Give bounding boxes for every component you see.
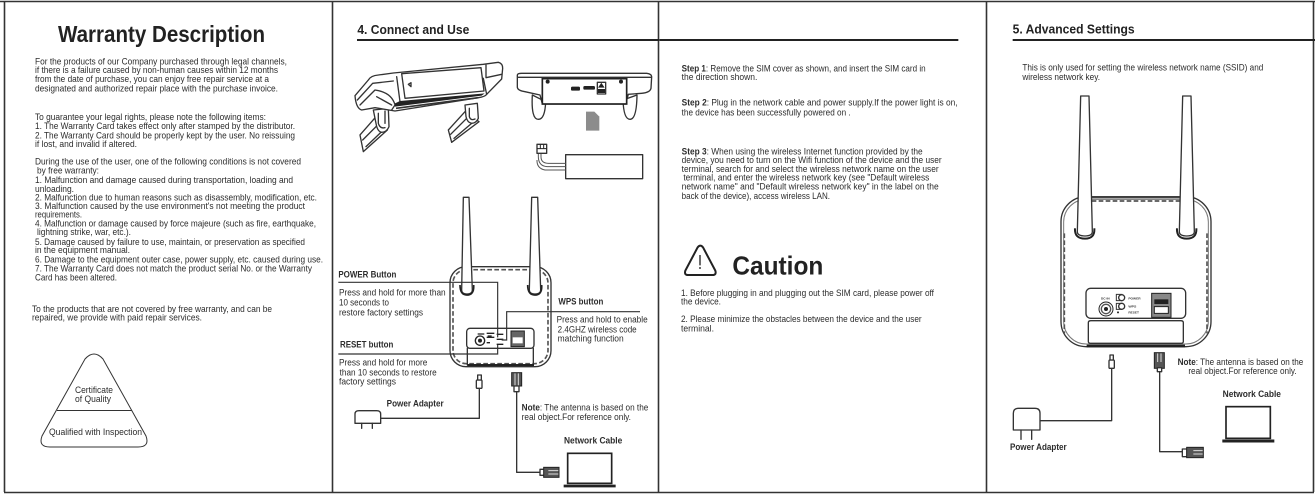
text block: step 3: terminal, and enter the wireless network key (see "Default wireless bbox=[683, 173, 930, 183]
text block: step 3: network name" and "Default wireless network key" in the label on the bbox=[682, 181, 939, 191]
text block: warranty intro: For the products of our Company purchased through legal channels, bbox=[35, 56, 287, 66]
panel: warranty description bbox=[32, 21, 323, 447]
text block: POWER button description bbox=[339, 288, 446, 318]
port panel bbox=[467, 328, 534, 365]
title: warranty description: Warranty Description bbox=[58, 21, 265, 47]
note: antenna bbox=[1178, 357, 1303, 376]
text block: step 1 bbox=[682, 64, 926, 82]
panel: connect and use bbox=[338, 22, 659, 486]
text block: RESET button description: Press and hold for more bbox=[339, 358, 427, 368]
text block: conditions not covered: 6. Damage to the equipment outer case, power supply, etc. caused during use. bbox=[35, 254, 323, 264]
text block: step 1: the direction shown. bbox=[682, 72, 757, 82]
text block: conditions not covered: requirements. bbox=[35, 210, 82, 220]
text block: conditions not covered: 1. Malfunction and damage caused during transportation, loading and bbox=[35, 175, 293, 185]
illustration: router rear view bbox=[1061, 96, 1211, 347]
leader line: RESET button bbox=[338, 345, 498, 354]
icon: left antenna bbox=[1077, 96, 1092, 236]
illustration: router underside with SIM slot bbox=[517, 73, 652, 119]
text block: caution items: terminal. bbox=[681, 324, 714, 334]
illustration: power supply block bbox=[537, 144, 643, 179]
port panel bbox=[1086, 288, 1186, 346]
text block: advanced settings intro bbox=[1021, 63, 1263, 82]
text block: caution items: 1. Before plugging in and plugging out the SIM card, please power off bbox=[681, 288, 934, 298]
label: RESET button: RESET button bbox=[340, 340, 393, 350]
icon: SIM card bbox=[586, 112, 599, 131]
text block: conditions not covered: 5. Damage caused by failure to use, maintain, or preservation as specified bbox=[35, 237, 305, 247]
text block: conditions not covered: During the use of the user, one of the following conditions is not covered bbox=[35, 157, 301, 167]
text block: paid repair services bbox=[32, 304, 272, 323]
note: antenna: real object.For reference only. bbox=[1188, 366, 1297, 376]
note: antenna: real object.For reference only. bbox=[522, 412, 631, 422]
leader line: POWER button bbox=[338, 282, 498, 337]
text block: step 1: Step 1: Remove the SIM cover as shown, and insert the SIM card in bbox=[682, 64, 926, 74]
text block: legal rights: 1. The Warranty Card takes effect only after stamped by the distributor. bbox=[35, 121, 295, 131]
text block: conditions not covered: by free warranty: bbox=[37, 166, 99, 176]
text block: RESET button description: factory settings bbox=[339, 376, 396, 386]
text block: WPS button description: matching function bbox=[558, 333, 624, 343]
text block: advanced settings intro: This is only used for setting the wireless network name (SSID) and bbox=[1022, 63, 1263, 73]
text block: POWER button description: restore factory settings bbox=[339, 308, 423, 318]
heading: advanced settings: 5. Advanced Settings bbox=[1013, 21, 1135, 36]
icon: right antenna bbox=[529, 197, 541, 294]
leader line: WPS button bbox=[502, 312, 640, 340]
text block: legal rights: 2. The Warranty Card should be properly kept by the user. No reissuing bbox=[35, 131, 295, 141]
text block: caution items: the device. bbox=[681, 297, 721, 307]
text block: legal rights: if lost, and invalid if altered. bbox=[35, 139, 137, 149]
port panel: DC-IN bbox=[1101, 297, 1110, 301]
text block: POWER button description: 10 seconds to bbox=[339, 297, 389, 307]
icon: right antenna bbox=[1179, 96, 1194, 236]
illustration: power adapter and cable bbox=[1013, 355, 1114, 439]
text block: step 3: device, you need to turn on the Wifi function of the device and the user bbox=[682, 155, 942, 165]
text block: legal rights bbox=[35, 112, 295, 149]
text block: conditions not covered: lightning strike, war, etc.). bbox=[37, 227, 131, 237]
text block: RESET button description: than 10 seconds to restore bbox=[340, 367, 437, 377]
icon: caution triangle bbox=[685, 246, 716, 275]
icon: laptop bbox=[564, 453, 616, 486]
icon: certificate of quality triangle: of Quality bbox=[75, 394, 111, 404]
text block: warranty intro: designated and authorized repair place with the purchase invoice. bbox=[35, 84, 278, 94]
label: network cable: Network Cable bbox=[564, 435, 622, 445]
panel: steps and caution bbox=[659, 40, 958, 334]
illustration: router underside with cover bbox=[355, 62, 503, 152]
text block: conditions not covered: in the equipment manual. bbox=[35, 245, 130, 255]
text block: conditions not covered: 3. Malfunction caused by the use environment's not meeting the product bbox=[35, 201, 305, 211]
icon: certificate of quality triangle bbox=[41, 354, 147, 447]
text block: paid repair services: repaired, we provide with paid repair services. bbox=[32, 313, 202, 323]
text block: legal rights: To guarantee your legal rights, please note the following items: bbox=[35, 112, 266, 122]
text block: conditions not covered: unloading. bbox=[35, 184, 74, 194]
text block: advanced settings intro: wireless network key. bbox=[1021, 72, 1100, 82]
text block: WPS button description: 2.4GHZ wireless code bbox=[558, 325, 637, 335]
text block: step 3 bbox=[682, 146, 942, 201]
port panel: WPS bbox=[1128, 305, 1136, 309]
icon: laptop bbox=[1222, 407, 1274, 441]
label: power adapter: Power Adapter bbox=[387, 399, 444, 409]
panel: advanced settings bbox=[1010, 21, 1315, 458]
text block: WPS button description bbox=[557, 315, 648, 343]
text block: conditions not covered: 4. Malfunction or damage caused by force majeure (such as fire, earthquake, bbox=[35, 219, 316, 229]
text block: POWER button description: Press and hold for more than bbox=[339, 288, 446, 298]
text block: step 2 bbox=[682, 97, 958, 118]
label: power adapter: Power Adapter bbox=[1010, 442, 1067, 452]
text block: WPS button description: Press and hold to enable bbox=[557, 315, 648, 325]
heading: caution: Caution bbox=[732, 250, 823, 280]
icon: left antenna bbox=[462, 197, 472, 294]
note: antenna bbox=[522, 402, 648, 422]
text block: paid repair services: To the products that are not covered by free warranty, and can be bbox=[32, 304, 272, 314]
illustration: network cable bbox=[1154, 353, 1203, 458]
illustration: power adapter and cable bbox=[355, 375, 482, 428]
illustration: network cable bbox=[512, 373, 559, 477]
label: WPS button: WPS button bbox=[558, 297, 603, 307]
text block: warranty intro bbox=[35, 56, 287, 94]
text block: step 3: Step 3: When using the wireless Internet function provided by the bbox=[682, 146, 923, 156]
text block: warranty intro: if there is a failure caused by non-human causes within 12 months bbox=[35, 65, 278, 75]
heading: connect and use: 4. Connect and Use bbox=[357, 22, 469, 37]
text block: caution items bbox=[681, 288, 934, 334]
text block: conditions not covered: Card has been altered. bbox=[35, 273, 117, 283]
icon: certificate of quality triangle: Qualified with Inspection bbox=[49, 427, 142, 437]
text block: conditions not covered bbox=[35, 157, 323, 283]
port panel: RESET bbox=[1128, 311, 1139, 315]
text block: step 3: back of the device), access wireless LAN. bbox=[682, 191, 830, 201]
text block: warranty intro: from the date of purchase, you can enjoy free repair service at a bbox=[35, 74, 270, 84]
text block: RESET button description bbox=[339, 358, 437, 386]
text block: conditions not covered: 7. The Warranty Card does not match the product serial No. or the Warranty bbox=[35, 263, 312, 273]
text block: conditions not covered: 2. Malfunction due to human reasons such as disassembly, modification, etc. bbox=[35, 192, 317, 202]
note: antenna: Note: The antenna is based on the bbox=[1178, 357, 1303, 367]
note: antenna: Note: The antenna is based on the bbox=[522, 402, 648, 412]
text block: step 3: terminal, search for and select the wireless network name on the user bbox=[682, 164, 939, 174]
text block: caution items: 2. Please minimize the obstacles between the device and the user bbox=[681, 314, 922, 324]
port panel: POWER bbox=[1128, 297, 1142, 301]
label: POWER button: POWER Button bbox=[338, 270, 396, 280]
label: network cable: Network Cable bbox=[1223, 389, 1281, 399]
text block: step 2: the device has been successfully powered on . bbox=[682, 108, 851, 118]
icon: certificate of quality triangle: Certificate bbox=[75, 385, 113, 395]
text block: step 2: Step 2: Plug in the network cable and power supply.If the power light is on, bbox=[682, 97, 958, 107]
illustration: router rear view bbox=[338, 197, 648, 486]
